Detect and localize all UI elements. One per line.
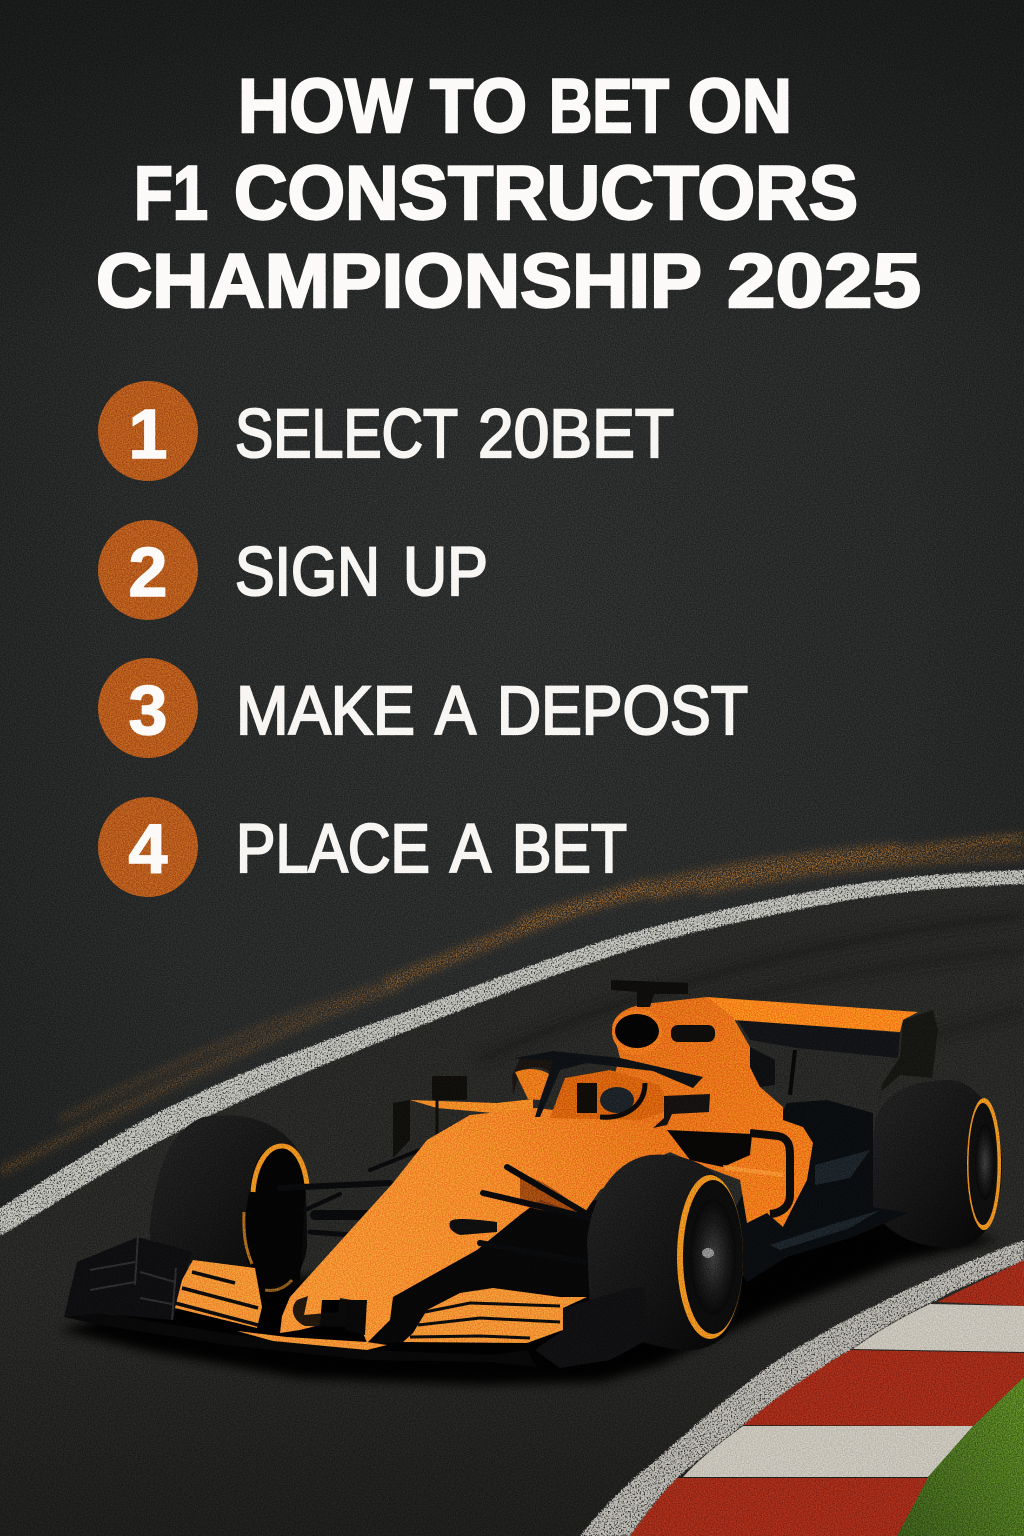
step 4: 4 [129, 810, 168, 888]
main plane [64, 1313, 537, 1367]
lower mirror [653, 1094, 710, 1128]
halo [512, 1051, 703, 1117]
track edge line [0, 870, 1024, 1236]
airbox rear shadow [750, 1047, 775, 1087]
orange plane strip [237, 1331, 387, 1350]
T-cam [611, 980, 688, 1007]
front left tyre [150, 1115, 307, 1291]
airbox [612, 1009, 662, 1055]
step 3 [98, 658, 748, 758]
front suspension arms (right) [480, 1167, 590, 1262]
step 1: 20BET [478, 395, 674, 472]
car body and nose [280, 1108, 675, 1343]
right orange flaps [403, 1288, 587, 1343]
step 3: 3 [129, 671, 167, 749]
title: CHAMPIONSHIP [96, 239, 702, 324]
left orange flaps [175, 1260, 262, 1328]
title: TO [430, 64, 527, 149]
kerb: grass, red and white bands [580, 1240, 1024, 1536]
step 4 [98, 797, 627, 897]
step 4: BET [512, 810, 627, 887]
orange dust trail [0, 838, 1024, 1172]
right endplate [535, 1288, 647, 1368]
front wing [64, 1235, 647, 1368]
step 4: A [450, 810, 491, 887]
rear tyre [869, 1080, 1002, 1248]
sidepod shading [520, 1173, 585, 1215]
dark underbody beneath nose [375, 1200, 600, 1345]
front suspension arms (left) [280, 1150, 420, 1236]
title: CONSTRUCTORS [234, 151, 858, 236]
cockpit [550, 1070, 670, 1120]
title [96, 64, 921, 324]
title: ON [688, 64, 792, 149]
rear wing [707, 997, 938, 1108]
step 1: 1 [129, 395, 167, 473]
rear floor and diffuser [720, 1100, 908, 1282]
step 2 [98, 520, 488, 620]
title: HOW [238, 64, 412, 149]
step 1: SELECT [235, 395, 458, 472]
front right tyre [587, 1155, 743, 1350]
engine cover [600, 997, 813, 1227]
side inlet and turning vanes [667, 1130, 790, 1214]
step 2: UP [403, 533, 488, 610]
step 3: MAKE [236, 672, 415, 749]
left barge fin and bargeboard [393, 1076, 533, 1158]
step 3: DEPOST [497, 672, 748, 749]
step 4: PLACE [236, 810, 430, 887]
title: BET [549, 64, 669, 149]
title: 2025 [727, 239, 921, 324]
car shadow [60, 1215, 1000, 1385]
race track asphalt [0, 877, 1024, 1536]
step 3: A [435, 672, 476, 749]
steering stub [449, 1219, 497, 1235]
orange F1 car [60, 980, 1002, 1385]
upper mirror [671, 1025, 715, 1042]
title: F1 [134, 151, 208, 236]
step 1 [98, 381, 674, 481]
nose cut-outs [293, 1296, 352, 1327]
left endplate and dark flaps [64, 1237, 192, 1320]
step 2: SIGN [235, 533, 380, 610]
step 2: 2 [129, 533, 167, 611]
